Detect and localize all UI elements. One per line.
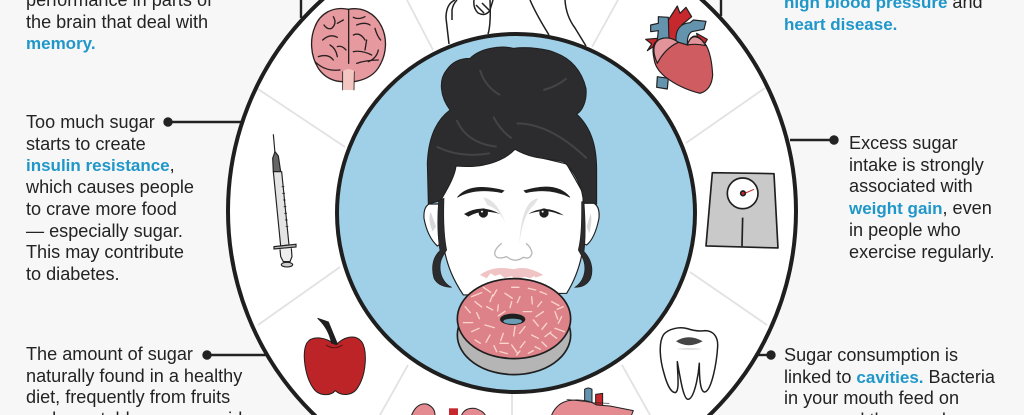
text: insulin resistance: insulin resistance, [26,155,175,175]
nose [495,243,532,260]
connector lines [164,0,838,358]
text: natural sugar: diet, frequently from fruits [26,387,230,407]
icon: heart [646,6,713,93]
hair [427,47,597,204]
text: memory: memory. [26,34,96,53]
text: insulin resistance: to crave more food [26,199,177,219]
text: insulin resistance: to diabetes. [26,264,120,284]
face [441,149,583,295]
icon: apple [304,318,365,395]
text: heart disease [784,0,983,34]
ears [424,203,599,246]
text: insulin resistance [26,112,194,284]
text: weight gain: associated with [849,176,973,196]
donut [457,295,571,375]
text: cavities: in your mouth feed on [784,388,959,408]
text: weight gain: weight gain, even [849,198,992,218]
icon: weighing scale [706,173,778,248]
icon: tooth [660,328,718,399]
lips [480,268,543,278]
text: heart disease: heart disease. [784,15,897,34]
icon: syringe [273,134,296,267]
text: weight gain: exercise regularly. [849,242,994,262]
text: weight gain: intake is strongly [849,155,984,175]
face shading [483,197,538,243]
text: cavities [784,345,995,415]
text: natural sugar: The amount of sugar [26,344,193,364]
text: insulin resistance: which causes people [26,177,194,197]
eyebrows [457,187,570,197]
icon: liver [550,388,633,415]
text: natural sugar: naturally found in a healthy [26,366,242,386]
icon: body at top [446,0,586,46]
text: cavities: linked to cavities. Bacteria [784,367,995,387]
icon: kidneys [411,404,487,415]
text: weight gain: in people who [849,220,961,240]
text: insulin resistance: starts to create [26,134,146,154]
text: weight gain [849,133,994,262]
text: weight gain: Excess sugar [849,133,958,153]
text: memory [26,0,212,53]
eyes [464,209,564,217]
woman with donut [424,47,599,375]
outer ring [228,0,796,415]
hair strands [433,198,592,287]
text: natural sugar [26,344,252,415]
central circle [337,34,695,392]
icon: brain [312,9,385,90]
text: insulin resistance: — especially sugar. [26,221,183,241]
text: insulin resistance: Too much sugar [26,112,155,132]
text: insulin resistance: This may contribute [26,242,184,262]
text: cavities: Sugar consumption is [784,345,958,365]
text: memory: the brain that deal with [26,12,208,32]
